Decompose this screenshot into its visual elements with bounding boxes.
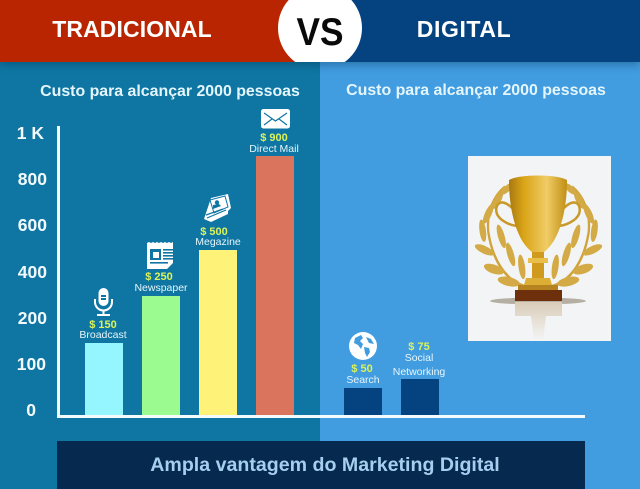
text: conclusion: Ampla vantagem do Marketing Digital (150, 454, 500, 476)
label: newspaper: Newspaper (134, 282, 188, 294)
heading: digital: DIGITAL (417, 16, 511, 42)
y axis labels: 400 (18, 262, 47, 282)
label: search: Search (346, 374, 380, 386)
label: magazine: Megazine (195, 236, 241, 248)
banner: conclusion (57, 441, 585, 489)
bar: magazine (199, 250, 236, 415)
y axis labels: 100 (17, 354, 46, 374)
icon: microphone (94, 288, 113, 316)
header: tradicional banner (0, 0, 320, 62)
y axis labels: 0 (26, 400, 36, 420)
y axis labels (17, 123, 47, 420)
heading: tradicional: TRADICIONAL (52, 16, 212, 42)
chart axis horizontal (57, 415, 585, 418)
subtitle: traditional cost: Custo para alcançar 2000 pessoas (40, 83, 300, 100)
icon: magazine (204, 194, 231, 222)
bar: newspaper (142, 296, 180, 415)
subtitle: digital cost: Custo para alcançar 2000 pessoas (346, 82, 606, 99)
label: magazine: $ 500 (200, 226, 228, 238)
y axis labels: 1 K (17, 123, 44, 143)
label: newspaper (134, 271, 188, 294)
y axis labels: 800 (18, 169, 47, 189)
label: social networking (393, 341, 445, 378)
label: magazine (195, 226, 241, 248)
bar: social networking (401, 379, 438, 415)
badge: VS circle (278, 0, 362, 62)
header: digital banner (320, 0, 640, 62)
label: broadcast: $ 150 (89, 319, 117, 331)
trophy wreath (474, 181, 603, 288)
y axis labels: 200 (18, 308, 47, 328)
bar: broadcast (85, 343, 122, 415)
label: direct mail: Direct Mail (249, 143, 299, 155)
label: social networking: Networking (393, 366, 445, 378)
label: newspaper: $ 250 (145, 271, 173, 283)
label: broadcast: Broadcast (79, 329, 127, 341)
y axis labels: 600 (18, 215, 47, 235)
image: trophy (468, 156, 611, 341)
icon: envelope (261, 109, 290, 128)
label: broadcast (79, 319, 127, 341)
icon: newspaper (147, 242, 173, 269)
label: social networking: $ 75 (408, 341, 430, 353)
badge: VS circle: VS (296, 11, 344, 54)
bar: direct mail (256, 156, 294, 415)
chart axis vertical (57, 126, 60, 418)
label: search: $ 50 (351, 363, 373, 375)
icon: globe (349, 332, 377, 360)
label: direct mail: $ 900 (260, 132, 288, 144)
bar: search (344, 388, 382, 415)
label: social networking: Social (405, 352, 433, 364)
panel: digital background (320, 62, 640, 489)
label: direct mail (249, 132, 299, 155)
label: search (346, 363, 380, 386)
